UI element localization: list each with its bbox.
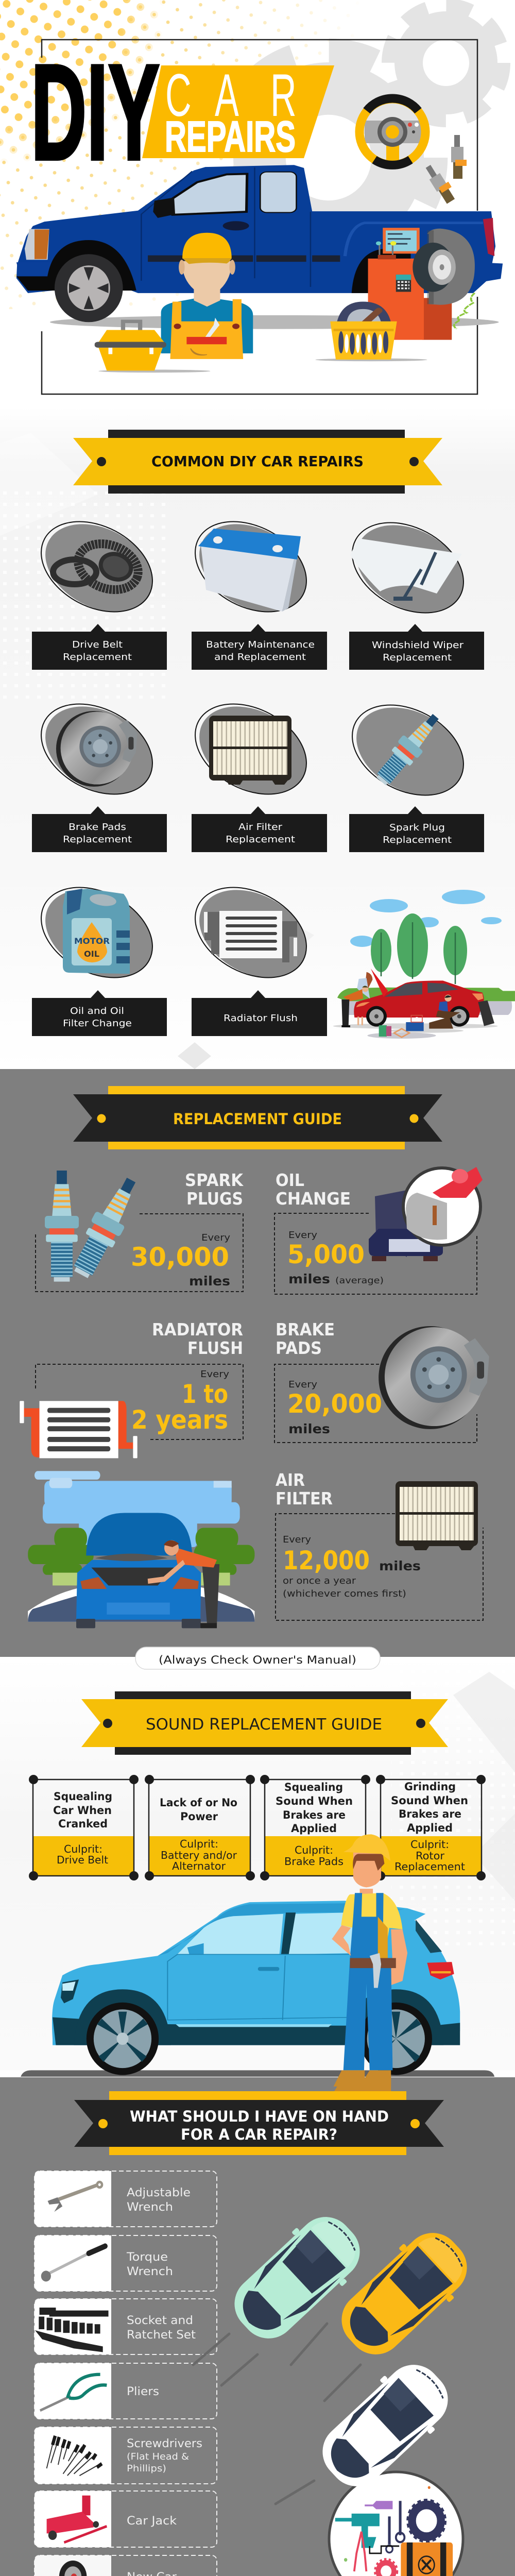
truck body	[16, 165, 503, 293]
heading: WHAT SHOULD I HAVE ON HAND	[130, 2108, 389, 2125]
stat: Every	[200, 1369, 229, 1380]
stat: Every	[288, 1379, 317, 1390]
label: and Replacement	[214, 652, 306, 663]
list: screwdrivers	[35, 2427, 217, 2484]
culprit: Brake Pads	[284, 1855, 344, 1868]
list: torque wrench: Wrench	[127, 2265, 173, 2278]
label: Replacement	[383, 652, 452, 663]
note pill	[135, 1647, 380, 1669]
stat: (average)	[335, 1276, 384, 1286]
truck stripes	[148, 256, 340, 262]
dashed box	[36, 1364, 243, 1439]
symptom: Applied	[291, 1822, 337, 1835]
symptom: Grinding	[404, 1781, 456, 1793]
symptom: Lack of or No	[160, 1797, 237, 1809]
navy gear	[412, 2505, 441, 2537]
list: screwdrivers: Phillips)	[127, 2463, 166, 2474]
illustration: mechanic under car hood	[28, 1471, 254, 1628]
illustration: white car top view	[308, 2350, 462, 2501]
banner: replacement guide	[73, 1086, 442, 1149]
icon: socket set	[38, 2308, 109, 2351]
icon: torque wrench	[41, 2246, 105, 2281]
illustration: blue SUV	[21, 1901, 494, 2077]
card: spark plug	[337, 687, 484, 852]
list: socket set	[35, 2299, 217, 2354]
list: adjustable wrench	[35, 2171, 217, 2227]
dashed box	[276, 1514, 483, 1620]
truck shadow	[50, 315, 499, 329]
props	[379, 1025, 387, 1037]
front wheel	[74, 1989, 171, 2045]
card: no power	[145, 1775, 255, 1880]
symptom: Applied	[407, 1822, 453, 1834]
icon: screwdrivers	[47, 2436, 102, 2476]
stat: 12,000	[283, 1546, 370, 1575]
panel: common DIY car repairs background	[0, 407, 515, 1069]
icon: steering wheel	[359, 98, 425, 165]
list: new car part	[35, 2555, 217, 2576]
stat: 30,000	[131, 1242, 229, 1272]
dashed box	[36, 1214, 243, 1292]
stat: 5,000	[287, 1240, 365, 1269]
heading: COMMON DIY CAR REPAIRS	[151, 453, 364, 470]
icon: small spark plugs	[423, 135, 467, 205]
lower body	[53, 2017, 460, 2045]
banner: what should I have	[74, 2091, 444, 2155]
toolbox	[401, 2543, 453, 2576]
wrenches	[389, 2501, 400, 2544]
jug text: MOTOR	[74, 936, 110, 946]
symptom: Brakes are	[283, 1809, 346, 1821]
symptom: Cranked	[58, 1818, 108, 1830]
heading: SPARK	[185, 1170, 244, 1190]
stat: 1 to	[182, 1379, 228, 1409]
label: Windshield Wiper	[372, 640, 464, 651]
guide: radiator flush	[20, 1319, 243, 1458]
trees	[28, 1528, 254, 1575]
icon: radiator	[204, 911, 297, 962]
list: screwdrivers: (Flat Head &	[127, 2451, 189, 2462]
card: radiator	[180, 869, 327, 1036]
panel: what should I have on hand	[0, 2077, 515, 2576]
stat	[287, 1230, 384, 1286]
card: air filter	[180, 686, 327, 852]
symptom: Car When	[53, 1804, 112, 1817]
symptom	[391, 1781, 468, 1834]
culprit: Culprit:	[410, 1838, 449, 1851]
icon: spark plugs	[45, 1171, 146, 1282]
illustration: mint car top view	[220, 2202, 374, 2353]
truck light and bumper	[25, 229, 49, 260]
symptom	[276, 1781, 353, 1835]
label: Replacement	[63, 652, 132, 663]
list: car jack: Car Jack	[127, 2515, 177, 2528]
label: Replacement	[226, 834, 295, 845]
list: pliers	[35, 2363, 217, 2419]
guide: oil change: CHANGE	[276, 1189, 351, 1209]
guide: air filter: FILTER	[276, 1488, 333, 1509]
illustration: red car repair scene	[333, 890, 515, 1039]
label: Oil and Oil	[70, 1006, 124, 1016]
illustration: pickup truck	[16, 165, 503, 329]
hero gears	[222, 5, 504, 264]
heading: REPLACEMENT GUIDE	[173, 1110, 342, 1128]
stat: miles	[288, 1272, 330, 1286]
title: DIY: DIY	[31, 36, 160, 188]
label: Brake Pads	[68, 822, 126, 833]
label: Filter Change	[63, 1018, 132, 1029]
stat: Every	[288, 1230, 317, 1241]
note pill: (Always Check Owner's Manual)	[159, 1654, 356, 1666]
label: Drive Belt	[72, 639, 123, 650]
culprit	[394, 1838, 465, 1873]
culprit: Culprit:	[64, 1843, 102, 1855]
symptom	[160, 1797, 237, 1823]
people	[366, 972, 372, 988]
label	[32, 806, 167, 852]
spare tires	[478, 1001, 494, 1026]
illustration: worker boots	[334, 2076, 391, 2093]
hero frame	[42, 40, 477, 394]
banner: common DIY car repairs	[73, 430, 442, 494]
stat: miles	[379, 1558, 421, 1573]
icon: battery	[198, 529, 301, 612]
icon: tools circle	[329, 2472, 463, 2576]
culprit: Culprit:	[295, 1844, 333, 1856]
title block	[31, 36, 334, 188]
stat	[131, 1369, 229, 1435]
guide: brake pads: PADS	[276, 1338, 322, 1358]
list: adjustable wrench: Adjustable	[127, 2187, 191, 2199]
background: halftone dots	[0, 0, 360, 309]
front wheel	[46, 240, 136, 291]
mechanic	[202, 1564, 219, 1624]
label: Spark Plug	[389, 822, 445, 833]
rear wheel	[347, 1989, 443, 2045]
list: torque wrench: Torque	[126, 2251, 168, 2264]
dashed box	[274, 1213, 477, 1294]
icon: radiator	[20, 1401, 138, 1458]
stat: 20,000	[287, 1389, 382, 1419]
stat: Every	[201, 1232, 230, 1243]
stat	[131, 1232, 230, 1289]
panel: replacement guide	[0, 1069, 515, 1657]
list: pliers: Pliers	[127, 2385, 159, 2398]
title ribbon	[142, 65, 334, 158]
icon: brake disc	[379, 1326, 489, 1429]
culprit	[57, 1843, 108, 1866]
label	[349, 806, 484, 852]
car	[86, 1513, 192, 1555]
icon: wiper	[350, 538, 462, 601]
illustration: mechanic	[161, 233, 253, 359]
truck windows	[169, 174, 247, 215]
label: Radiator Flush	[224, 1013, 298, 1024]
label	[32, 990, 167, 1036]
icon: motor oil jug	[63, 889, 130, 974]
heading: SOUND REPLACEMENT GUIDE	[146, 1716, 382, 1734]
screwdriver label: Screwdrivers	[127, 2437, 202, 2450]
heading: AIR	[276, 1470, 305, 1490]
heading: FOR A CAR REPAIR?	[181, 2126, 337, 2143]
heading: BRAKE	[276, 1319, 335, 1340]
list: torque wrench	[35, 2235, 217, 2291]
stat: (whichever comes first)	[283, 1588, 406, 1599]
icon: motor oil jug: OIL	[84, 949, 99, 959]
purple tool	[365, 2501, 392, 2509]
guide: oil change	[274, 1167, 483, 1294]
culprit: Drive Belt	[57, 1854, 108, 1866]
background: sound guide section	[0, 1657, 515, 2070]
guide: radiator flush: FLUSH	[187, 1338, 243, 1358]
label	[349, 624, 484, 670]
culprit	[284, 1844, 344, 1868]
drill	[335, 2514, 380, 2548]
card: oil	[26, 869, 168, 1036]
illustration: wheel balancer machine	[368, 228, 475, 340]
icon: oil change	[369, 1167, 483, 1261]
stat: or once a year	[283, 1575, 356, 1586]
card: grinding sound	[376, 1775, 486, 1880]
icon: car jack	[47, 2496, 107, 2543]
stat: Every	[283, 1534, 311, 1545]
red car	[354, 980, 484, 1018]
stat	[287, 1379, 382, 1436]
culprit: Rotor	[416, 1850, 445, 1862]
dashed box	[274, 1364, 477, 1443]
stat: miles	[189, 1274, 230, 1289]
card: brake pads	[26, 686, 168, 852]
label	[32, 624, 167, 670]
pink gear	[378, 2563, 394, 2576]
pliers	[354, 2532, 366, 2571]
list: adjustable wrench: Wrench	[127, 2201, 173, 2214]
icon: belt	[53, 536, 145, 598]
label	[192, 806, 327, 852]
illustration: toolbox	[95, 319, 210, 372]
list: car jack	[35, 2491, 217, 2547]
icon: brake disc	[56, 711, 138, 787]
culprit: Culprit:	[180, 1838, 218, 1850]
ground strip	[21, 2070, 494, 2077]
card: squealing car	[29, 1775, 139, 1880]
banner: sound replacement guide	[81, 1691, 448, 1755]
list: socket set: Socket and	[127, 2314, 193, 2327]
label: Battery Maintenance	[206, 639, 315, 650]
illustration: yellow car top view	[327, 2218, 482, 2369]
heading: OIL	[276, 1170, 304, 1190]
culprit: Battery and/or	[161, 1849, 237, 1861]
sky	[35, 1471, 240, 1547]
stat	[283, 1534, 421, 1599]
illustration: tire basket	[315, 302, 427, 361]
symptom: Squealing	[284, 1781, 343, 1793]
title: REPAIRS: REPAIRS	[165, 112, 296, 161]
label: Replacement	[383, 835, 452, 845]
symptom: Brakes are	[399, 1808, 461, 1820]
stat: 2 years	[131, 1405, 228, 1435]
card: wiper	[337, 504, 484, 670]
symptom: Squealing	[54, 1790, 112, 1803]
symptom: Sound When	[276, 1795, 353, 1807]
trees	[371, 913, 467, 977]
label: Air Filter	[238, 822, 283, 833]
card: drive belt	[26, 503, 168, 670]
stat: miles	[288, 1421, 330, 1436]
symptom: Sound When	[391, 1794, 468, 1807]
illustration: worker	[332, 1834, 407, 2087]
title: CAR: CAR	[165, 62, 297, 129]
guide: spark plugs: PLUGS	[186, 1189, 243, 1209]
culprit	[161, 1838, 237, 1872]
icon: car parts	[46, 2561, 98, 2576]
skid marks	[193, 2324, 360, 2504]
culprit: Alternator	[172, 1860, 226, 1872]
guide: spark plugs	[36, 1170, 244, 1292]
culprit: Replacement	[394, 1860, 465, 1873]
symptom: Power	[180, 1810, 218, 1823]
rear wheel arch	[352, 249, 411, 293]
icon: pliers	[40, 2375, 107, 2411]
heading: RADIATOR	[152, 1319, 243, 1340]
car body	[52, 1901, 460, 2045]
card: squealing brakes	[260, 1775, 370, 1880]
icon: air filter	[209, 716, 291, 785]
symptom	[53, 1790, 112, 1830]
icon: air filter	[396, 1481, 478, 1550]
clouds	[350, 890, 502, 947]
icon: spark plug	[371, 708, 445, 790]
guide: brake pads	[274, 1319, 489, 1443]
label	[192, 624, 327, 670]
label	[192, 990, 327, 1036]
list: socket set: Ratchet Set	[127, 2329, 196, 2342]
guide: air filter	[276, 1470, 483, 1620]
heading	[130, 2108, 389, 2143]
card: battery	[180, 503, 327, 670]
road	[28, 1585, 254, 1622]
icon: wrench	[48, 2181, 103, 2212]
label: Replacement	[63, 834, 132, 845]
